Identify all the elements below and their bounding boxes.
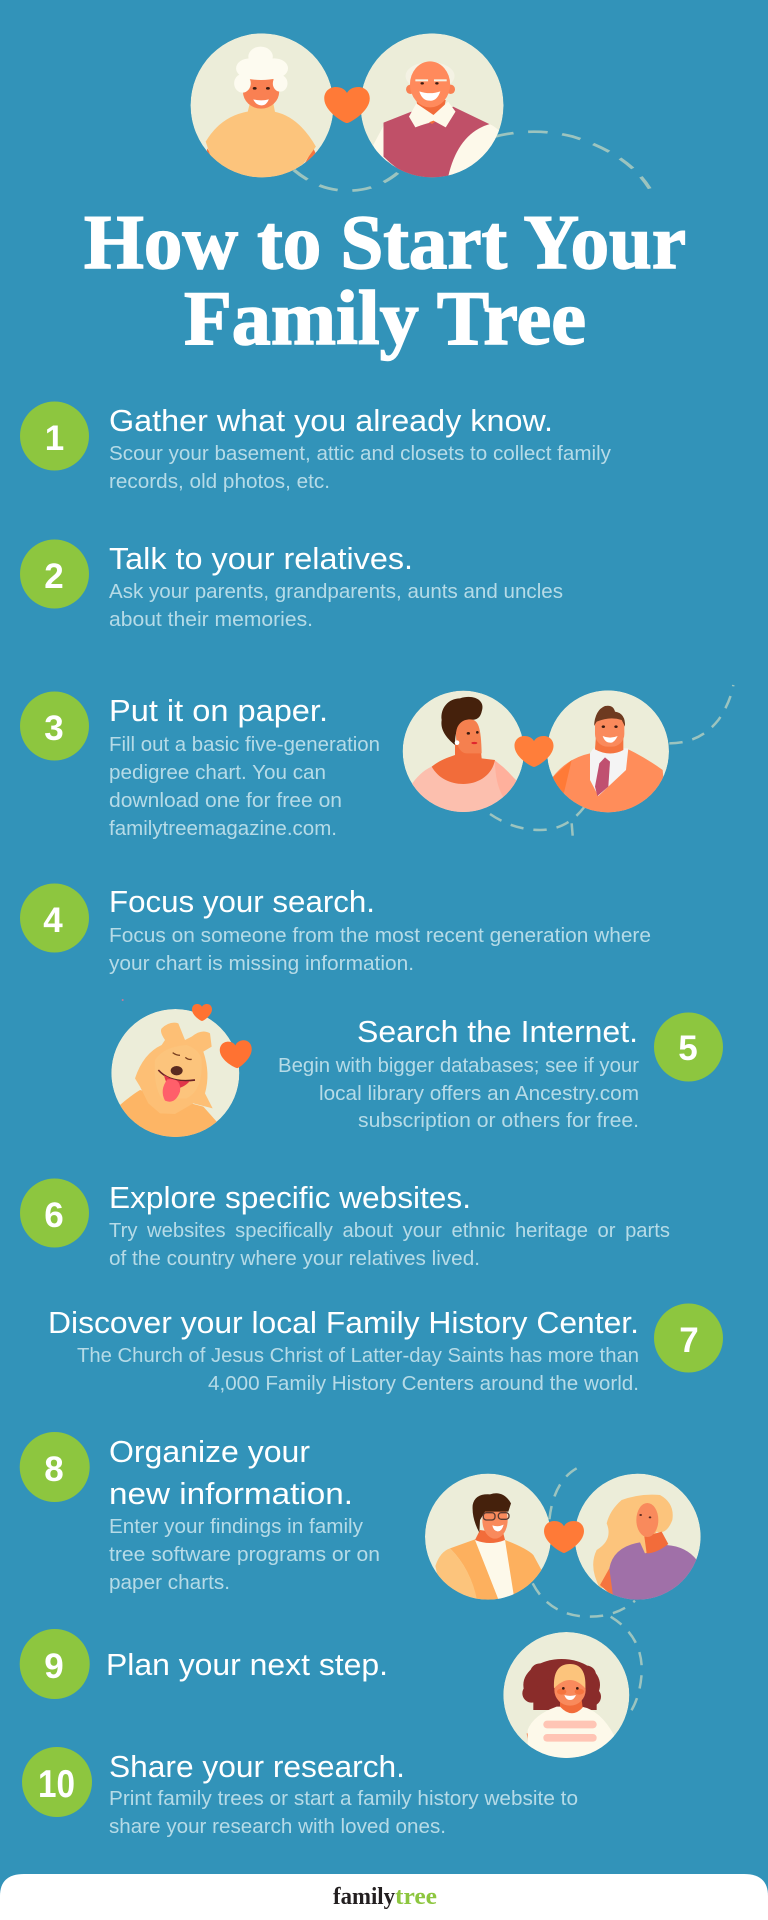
step 3 — [20, 692, 380, 840]
step 6: of the country where your relatives lived. — [109, 1247, 480, 1270]
title — [84, 199, 686, 361]
step 3: pedigree chart. You can — [109, 761, 326, 784]
portrait: blonde woman — [575, 1474, 701, 1602]
icon: small heart — [192, 1004, 212, 1021]
step 10: share your research with loved ones. — [109, 1815, 446, 1838]
step 5: Search the Internet. — [357, 1014, 638, 1049]
illustration: couple with updo and tie — [403, 685, 733, 836]
portrait: grandfather — [360, 33, 504, 180]
logo: tree — [395, 1884, 437, 1910]
step 2 — [20, 540, 563, 631]
portrait: woman with updo — [403, 691, 524, 817]
step 8 — [20, 1432, 380, 1594]
step 3: Fill out a basic five-generation — [109, 733, 380, 756]
step 9 — [20, 1629, 388, 1699]
step 4 — [20, 884, 651, 975]
illustration: dog — [111, 999, 253, 1143]
step 5: subscription or others for free. — [358, 1109, 639, 1132]
step 7: 7 — [679, 1321, 699, 1360]
step 4: 4 — [43, 901, 63, 940]
illustration: grandparents — [191, 33, 652, 193]
title: How to Start Your — [84, 199, 686, 285]
portrait: girl with curly hair — [503, 1632, 629, 1760]
step 4: your chart is missing information. — [109, 952, 414, 975]
portrait: grandmother — [191, 33, 334, 178]
step 10: Print family trees or start a family history website to — [109, 1787, 578, 1810]
title: Family Tree — [184, 275, 586, 361]
portrait: man with glasses — [425, 1474, 551, 1602]
step 6: Try websites specifically about your ethnic heritage or parts — [109, 1219, 670, 1242]
step 6: Explore specific websites. — [109, 1180, 471, 1215]
step 3: download one for free on — [109, 789, 342, 812]
step 8: tree software programs or on — [109, 1543, 380, 1566]
step 5 — [278, 1012, 723, 1132]
step 6: 6 — [44, 1196, 64, 1235]
step 8: Enter your findings in family — [109, 1515, 364, 1538]
illustration: couple and child — [425, 1468, 701, 1760]
icon: heart — [324, 87, 370, 123]
step 4: Focus your search. — [109, 884, 375, 919]
step 1 — [20, 402, 612, 493]
step 1: records, old photos, etc. — [109, 470, 330, 493]
step 5: 5 — [678, 1029, 698, 1068]
step 2: Talk to your relatives. — [109, 541, 413, 576]
step 1: Gather what you already know. — [109, 403, 553, 438]
step 1: 1 — [45, 419, 64, 458]
step 8: new information. — [109, 1476, 353, 1511]
portrait: man with tie — [547, 690, 669, 817]
step 10: Share your research. — [109, 1749, 405, 1784]
step 1: Scour your basement, attic and closets to collect family — [109, 442, 612, 465]
step 2: 2 — [44, 557, 64, 596]
step 9: 9 — [44, 1647, 64, 1686]
step 10 — [22, 1747, 578, 1838]
step 4: Focus on someone from the most recent generation where — [109, 924, 651, 947]
step 8: 8 — [44, 1450, 64, 1489]
step 7 — [48, 1304, 723, 1395]
step 3: familytreemagazine.com. — [109, 817, 337, 840]
step 9: Plan your next step. — [106, 1647, 388, 1682]
step 6 — [20, 1178, 670, 1270]
step 8: Organize your — [109, 1434, 310, 1469]
step 10: 10 — [38, 1763, 75, 1806]
footer — [0, 1874, 768, 1920]
step 3: Put it on paper. — [109, 693, 328, 728]
step 8: paper charts. — [109, 1571, 230, 1594]
step 7: Discover your local Family History Center. — [48, 1305, 639, 1340]
icon: heart — [514, 736, 554, 767]
step 3: 3 — [44, 709, 64, 748]
step 2: about their memories. — [109, 608, 313, 631]
step 5: Begin with bigger databases; see if your — [278, 1054, 639, 1077]
icon: large heart — [219, 1040, 253, 1069]
step 5: local library offers an Ancestry.com — [319, 1082, 639, 1105]
logo — [333, 1884, 437, 1910]
step 2: Ask your parents, grandparents, aunts and uncles — [109, 580, 563, 603]
step 7: 4,000 Family History Centers around the world. — [208, 1372, 639, 1395]
step 7: The Church of Jesus Christ of Latter-day Saints has more than — [77, 1344, 639, 1367]
icon: heart — [544, 1521, 584, 1553]
logo: family — [333, 1884, 395, 1910]
